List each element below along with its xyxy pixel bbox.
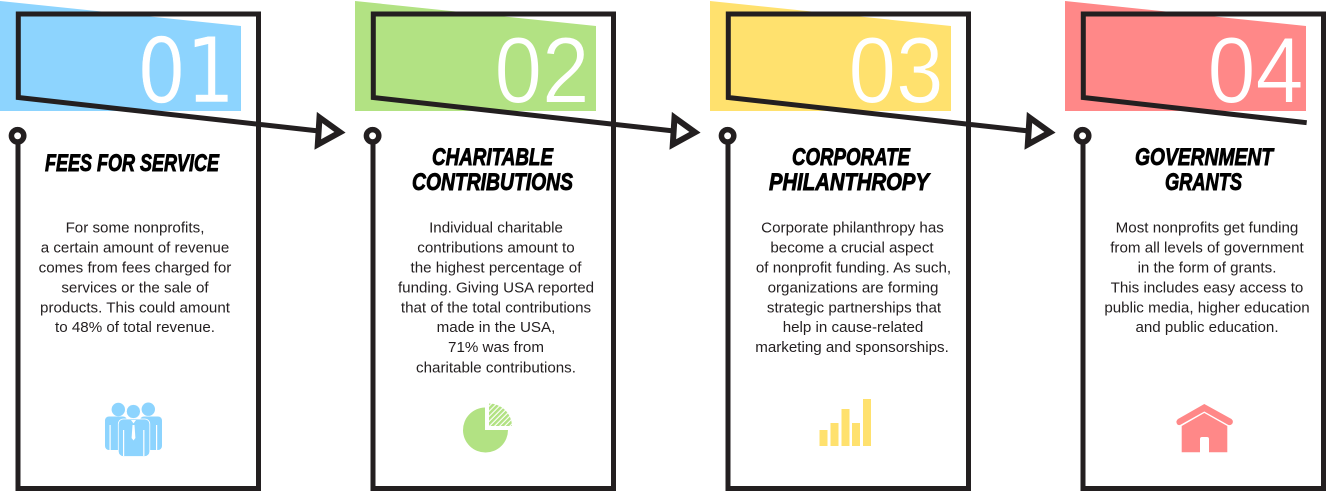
- heading: CONTRIBUTIONS: [412, 169, 574, 196]
- body text: For some nonprofits,: [66, 220, 204, 237]
- arrow head: [318, 118, 340, 144]
- body text: to 48% of total revenue.: [55, 319, 215, 336]
- heading: GRANTS: [1165, 169, 1242, 196]
- body text: public media, higher education: [1104, 299, 1310, 316]
- panel frame with arrow line: [18, 14, 319, 488]
- body text: Most nonprofits get funding: [1116, 220, 1298, 237]
- panel: fees for service: [0, 1, 340, 488]
- connector node: [1076, 130, 1089, 142]
- connector node: [721, 130, 734, 142]
- heading: GOVERNMENT: [1135, 144, 1275, 171]
- panel: government grants: [1065, 1, 1324, 488]
- body text: Corporate philanthropy has: [761, 220, 944, 237]
- body text: organizations are forming: [768, 280, 938, 297]
- body text: comes from fees charged for: [39, 260, 231, 277]
- body text: of nonprofit funding. As such,: [756, 260, 951, 277]
- body text: contributions amount to: [417, 240, 575, 257]
- number 01: 01: [137, 19, 235, 124]
- body text: Individual charitable: [429, 220, 563, 237]
- heading: [769, 144, 931, 196]
- body text: 71% was from: [448, 339, 544, 356]
- number banner 04: [1065, 1, 1306, 111]
- body text: [755, 220, 951, 356]
- body text: a certain amount of revenue: [41, 240, 229, 257]
- number 02: 02: [494, 18, 590, 122]
- body text: in the form of grants.: [1138, 260, 1276, 277]
- body text: products. This could amount: [40, 300, 231, 317]
- number banner 02: [355, 1, 596, 111]
- heading: [412, 144, 574, 196]
- number banner 03: [710, 1, 951, 111]
- body text: marketing and sponsorships.: [755, 339, 949, 356]
- panel frame with arrow line: [373, 14, 674, 488]
- body text: [1104, 220, 1310, 336]
- connector node: [11, 130, 24, 142]
- body text: from all levels of government: [1110, 240, 1305, 257]
- panel frame with line: [1083, 14, 1324, 488]
- arrow head: [673, 118, 695, 144]
- body text: [398, 220, 594, 376]
- heading: PHILANTHROPY: [769, 169, 931, 196]
- body text: help in cause-related: [783, 319, 923, 336]
- body text: that of the total contributions: [401, 299, 592, 316]
- heading: CORPORATE: [792, 144, 911, 171]
- heading: [1135, 144, 1275, 196]
- number 04: 04: [1208, 18, 1304, 122]
- number 03: 03: [848, 18, 944, 122]
- body text: funding. Giving USA reported: [398, 280, 594, 297]
- body text: charitable contributions.: [416, 359, 576, 376]
- icon: house: [1176, 404, 1233, 452]
- panel frame with arrow line: [728, 14, 1029, 488]
- panel: corporate philanthropy: [710, 1, 1050, 488]
- icon: bar chart: [820, 399, 871, 446]
- number banner 01: [0, 1, 241, 111]
- body text: services or the sale of: [61, 280, 209, 297]
- icon: people: [105, 402, 162, 456]
- arrow head: [1028, 118, 1050, 144]
- panel: charitable contributions: [355, 1, 695, 488]
- heading: FEES FOR SERVICE: [45, 150, 219, 177]
- body text: and public education.: [1135, 319, 1279, 336]
- heading: CHARITABLE: [432, 144, 554, 171]
- body text: made in the USA,: [437, 319, 555, 336]
- body text: become a crucial aspect: [770, 240, 934, 257]
- body text: This includes easy access to: [1111, 280, 1303, 297]
- body text: the highest percentage of: [411, 260, 582, 277]
- icon: pie chart: [463, 404, 512, 452]
- body text: [39, 220, 231, 336]
- connector node: [366, 130, 379, 142]
- body text: strategic partnerships that: [767, 299, 942, 316]
